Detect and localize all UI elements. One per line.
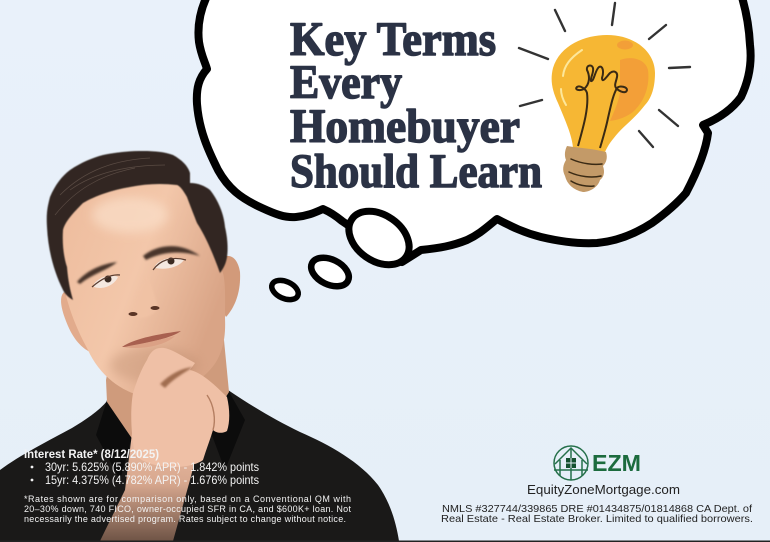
rate disclaimer xyxy=(24,494,351,524)
nose xyxy=(132,275,158,318)
bulb rays xyxy=(519,3,690,147)
ear left xyxy=(61,292,90,352)
license text: Real Estate - Real Estate Broker. Limited to qualified borrowers. xyxy=(441,513,753,525)
interest rate block xyxy=(24,447,351,524)
license text: NMLS #327744/339865 DRE #01434875/01814868 CA Dept. of xyxy=(442,503,752,515)
title: Homebuyer xyxy=(290,100,520,153)
thought circle medium xyxy=(307,252,353,292)
arm xyxy=(100,425,204,541)
thought circle large xyxy=(339,200,419,276)
hand xyxy=(131,348,229,467)
face xyxy=(58,177,225,396)
rate disclaimer: *Rates shown are for comparison only, based on a Conventional QM with xyxy=(24,494,351,504)
shirt xyxy=(0,390,399,541)
bulb filament xyxy=(576,66,627,148)
bulb base xyxy=(563,146,607,192)
thought circle small xyxy=(269,277,301,303)
eyes xyxy=(94,276,118,288)
face shading xyxy=(92,197,168,233)
rate list: 30yr: 5.625% (5.890% APR) - 1.842% points xyxy=(45,460,259,474)
logo icon: house in circle xyxy=(554,446,588,480)
rate list: 15yr: 4.375% (4.782% APR) - 1.676% points xyxy=(45,473,259,487)
website: EquityZoneMortgage.com xyxy=(527,482,680,497)
eyebrows xyxy=(77,262,117,284)
neck xyxy=(106,340,229,440)
thought bubble xyxy=(197,0,751,303)
title: Key Terms xyxy=(290,13,496,66)
EZM logo xyxy=(554,446,641,480)
man thinking xyxy=(0,151,399,541)
rate list xyxy=(31,460,259,487)
rate disclaimer: necessarily the advertised program. Rates subject to change without notice. xyxy=(24,514,346,524)
hair xyxy=(47,151,228,300)
title: Should Learn xyxy=(290,145,542,198)
icon: light bulb xyxy=(519,3,690,192)
ear right xyxy=(216,256,240,317)
rate disclaimer: 20–30% down, 740 FICO, owner-occupied SFR in CA, and $600K+ loan. Not xyxy=(24,504,351,514)
logo wordmark: EZM xyxy=(592,450,641,476)
rate heading: Interest Rate* (8/12/2025) xyxy=(24,447,159,461)
title: Every xyxy=(290,56,402,109)
bulb glass xyxy=(552,35,655,152)
license text xyxy=(441,503,753,525)
mouth xyxy=(122,331,181,347)
title xyxy=(290,13,542,198)
